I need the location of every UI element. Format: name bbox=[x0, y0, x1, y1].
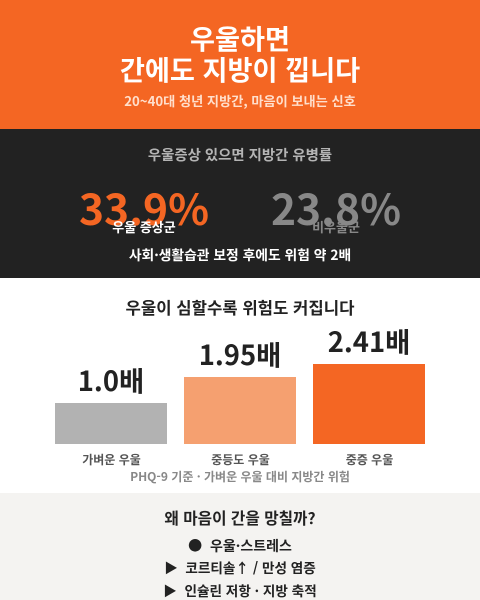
label: severe: 중증 우울 bbox=[346, 451, 393, 468]
title: 우울하면 bbox=[190, 17, 290, 57]
value: 2.41배: 2.41배 bbox=[328, 320, 410, 360]
prevalence heading: 우울증상 있으면 지방간 유병률 bbox=[148, 144, 332, 165]
value: 1.0배: 1.0배 bbox=[78, 359, 144, 399]
step: cortisol: ▶ 코르티솔↑ / 만성 염증 bbox=[164, 557, 316, 577]
label: mild: 가벼운 우울 bbox=[82, 451, 141, 468]
title: 간에도 지방이 낍니다 bbox=[120, 48, 360, 88]
bar: severe bbox=[313, 320, 425, 468]
value: 1.95배: 1.95배 bbox=[199, 333, 281, 373]
stat: depressed group 33.9%: 33.9% bbox=[79, 177, 209, 238]
panel: severity chart bbox=[0, 278, 480, 493]
stat: non-depressed group 23.8%: 23.8% bbox=[271, 177, 401, 238]
chart heading: 우울이 심할수록 위험도 커집니다 bbox=[126, 295, 354, 319]
step: depression and stress: ● 우울·스트레스 bbox=[188, 536, 292, 556]
title bbox=[120, 17, 360, 88]
adjusted risk note: 사회·생활습관 보정 후에도 위험 약 2배 bbox=[129, 244, 351, 264]
step: insulin resistance: ▶ 인슐린 저항 · 지방 축적 bbox=[163, 580, 317, 600]
bar rectangle: mild bbox=[55, 403, 167, 444]
panel: header bbox=[0, 0, 480, 129]
chart footnote: PHQ-9 기준 · 가벼운 우울 대비 지방간 위험 bbox=[130, 468, 350, 485]
panel: mechanism bbox=[0, 493, 480, 600]
label: moderate: 중등도 우울 bbox=[211, 451, 270, 468]
bar rectangle: severe bbox=[313, 364, 425, 444]
bar: mild bbox=[55, 359, 167, 468]
panel: prevalence bbox=[0, 129, 480, 278]
mechanism heading: 왜 마음이 간을 망칠까? bbox=[164, 506, 316, 529]
bar: moderate bbox=[184, 333, 296, 468]
label: depressed group: 우울 증상군 bbox=[112, 217, 176, 236]
label: non-depressed group: 비우울군 bbox=[312, 217, 360, 236]
subtitle: 20~40대 청년 지방간, 마음이 보내는 신호 bbox=[124, 91, 356, 110]
bar rectangle: moderate bbox=[184, 377, 296, 444]
